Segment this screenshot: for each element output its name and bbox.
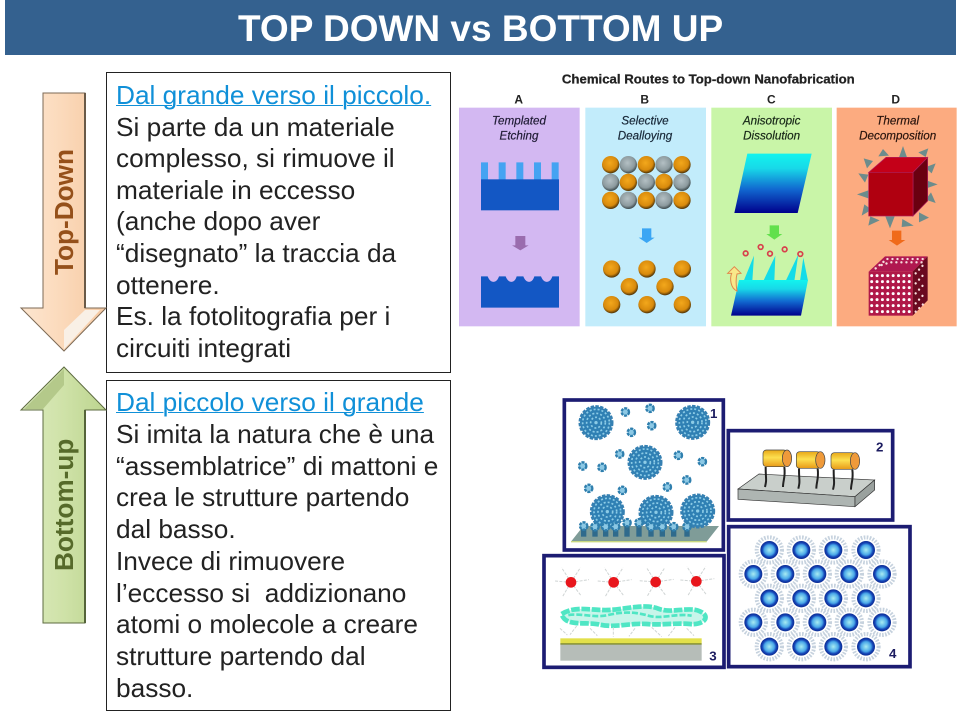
panel C: anisotropic dissolution (711, 93, 832, 326)
panel D: thermal decomposition: Thermal (876, 114, 919, 127)
panel D: thermal decomposition (837, 93, 957, 326)
text block: bottom-up description: l’eccesso si addizionano (116, 578, 406, 608)
text block: bottom-up description: Dal piccolo verso il grande (116, 387, 424, 417)
label: Bottom-up: Bottom-up (49, 439, 79, 571)
text block: top-down description: complesso, si rimuove il (116, 143, 395, 173)
panel 1: nanoclusters on substrate (564, 400, 723, 550)
text block: bottom-up description: dal basso. (116, 514, 236, 544)
text block: bottom-up description (116, 387, 438, 703)
panel B: selective dealloying: B (640, 93, 649, 107)
text block: bottom-up description: basso. (116, 673, 193, 703)
text block: bottom-up description: Si imita la natura che è una (116, 419, 434, 449)
panel C: anisotropic dissolution: C (767, 93, 776, 107)
title bar (5, 0, 956, 55)
text block: top-down description: (anche dopo aver (116, 206, 320, 236)
panel B: selective dealloying: Dealloying (618, 130, 673, 143)
text block: bottom-up description: strutture partendo dal (116, 641, 366, 671)
text block: top-down description: materiale in eccesso (116, 175, 355, 205)
text block: top-down description: Dal grande verso il piccolo. (116, 80, 431, 110)
panel C: anisotropic dissolution: Anisotropic (742, 114, 801, 127)
text block: top-down description: ottenere. (116, 270, 220, 300)
text block: bottom-up description: “assemblatrice” di mattoni e (116, 450, 438, 480)
figure: chemical routes to top-down nanofabrication (459, 71, 957, 326)
label: Top-Down: Top-Down (49, 149, 79, 275)
panel 3: layered molecular film (544, 556, 724, 667)
text block: bottom-up description: atomi o molecole a creare (116, 609, 418, 639)
panel C: anisotropic dissolution: Dissolution (743, 130, 800, 143)
panel: bottom-up text (106, 380, 451, 711)
text block: top-down description: “disegnato” la traccia da (116, 238, 396, 268)
panel A: templated etching (459, 93, 580, 326)
panel B: selective dealloying (585, 93, 706, 326)
text block: bottom-up description: Invece di rimuovere (116, 546, 345, 576)
text block: top-down description: Si parte da un materiale (116, 112, 395, 142)
text block: bottom-up description: crea le strutture partendo (116, 482, 409, 512)
panel A: templated etching: A (514, 93, 523, 107)
figure title: Chemical Routes to Top-down Nanofabrication (562, 71, 855, 86)
panel B: selective dealloying: Selective (621, 114, 669, 127)
figure: bottom-up self-assembly examples (544, 400, 910, 667)
panel A: templated etching: Templated (492, 114, 547, 127)
text block: top-down description: Es. la fotolitografia per i (116, 301, 390, 331)
number 3: 3 (709, 649, 717, 664)
title: TOP DOWN vs BOTTOM UP (238, 8, 723, 49)
number 2: 2 (876, 439, 883, 454)
panel A: templated etching: Etching (500, 130, 539, 143)
arrow: bottom-up (21, 367, 106, 623)
text block: top-down description (116, 80, 432, 363)
panel D: thermal decomposition: Decomposition (859, 130, 936, 143)
panel 2: molecules on surface (728, 431, 893, 520)
number 1: 1 (710, 406, 718, 421)
panel D: thermal decomposition: D (891, 93, 900, 107)
arrow: top-down (21, 93, 106, 351)
panel: top-down text (106, 72, 451, 373)
number 4: 4 (889, 646, 897, 661)
panel 4: hexagonal nanoparticle lattice (729, 527, 910, 667)
text block: top-down description: circuiti integrati (116, 333, 291, 363)
